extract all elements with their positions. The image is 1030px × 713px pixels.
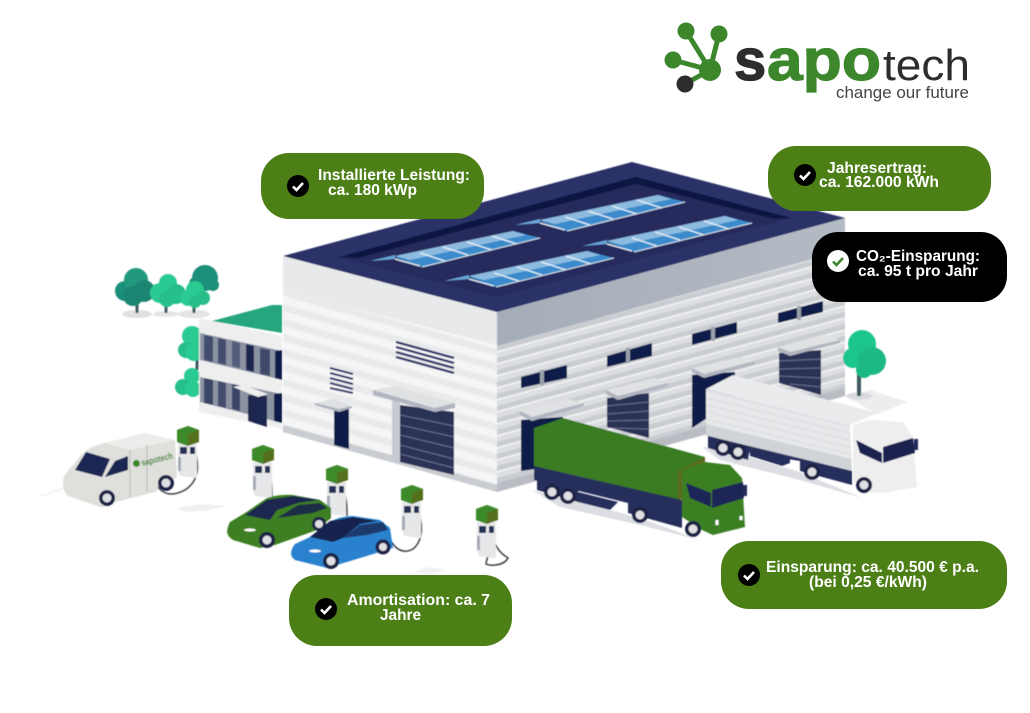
charger 4 — [391, 485, 423, 551]
green trailer top and side — [534, 418, 705, 500]
left wall plinth — [283, 425, 497, 492]
callout text line 2: ca. 180 kWp — [328, 182, 417, 199]
dock canopy 3 — [692, 357, 755, 378]
tree: right of building — [843, 330, 908, 414]
white truck windshield — [883, 438, 915, 463]
charger 5 — [476, 505, 508, 565]
side door canopy — [315, 399, 352, 412]
window 2 — [607, 343, 652, 367]
logo: sapotech — [664, 22, 970, 102]
roof inner floor — [339, 177, 791, 297]
callout text line 1: Installierte Leistung: — [318, 167, 470, 184]
charger 2 — [252, 445, 274, 498]
callout text line 1: Einsparung: ca. 40.500 € p.a. — [766, 559, 979, 576]
green car windshield and roof — [245, 496, 320, 520]
side door — [334, 408, 349, 449]
callout text line 2: Jahre — [380, 607, 421, 624]
callout text line 2: ca. 162.000 kWh — [819, 174, 939, 191]
callout: Installierte Leistung — [261, 153, 484, 219]
white trailer lower strip — [706, 424, 852, 472]
icon: check — [738, 564, 760, 586]
green truck headlights — [717, 516, 741, 525]
vent small — [330, 368, 353, 393]
green truck windshield — [712, 482, 744, 508]
right wall upper band — [497, 218, 845, 346]
white truck wheels — [715, 440, 872, 493]
callout text line 2: (bei 0,25 €/kWh) — [809, 574, 927, 591]
van windshield — [75, 452, 110, 477]
icon: check — [315, 598, 337, 620]
window 4 — [778, 301, 823, 323]
van logo: sapotech — [140, 451, 174, 468]
green truck cab back — [678, 457, 705, 500]
blue car side windows — [343, 522, 388, 538]
right wall plinth — [497, 388, 845, 492]
icon: check — [287, 175, 309, 197]
green truck side window — [686, 483, 711, 507]
blue car windshield and roof — [310, 517, 378, 542]
illustration: warehouse scene — [40, 162, 918, 574]
dock canopy 1 — [520, 399, 584, 421]
white trailer top — [706, 375, 877, 425]
left wall upper band — [283, 256, 497, 345]
green car wheels — [259, 517, 326, 548]
office building — [199, 305, 282, 432]
warehouse building — [283, 162, 845, 492]
logo icon: network nodes — [664, 22, 728, 92]
green car headlight — [244, 528, 256, 532]
callout text line 2: ca. 95 t pro Jahr — [858, 263, 978, 280]
window 3 — [692, 322, 737, 345]
charger 3 — [326, 465, 348, 516]
callout: Amortisation — [289, 575, 512, 646]
dock door 1 — [521, 417, 563, 471]
green roof — [212, 305, 282, 333]
trees: back-left group — [115, 265, 219, 318]
dock door 4 — [779, 350, 821, 395]
van roof — [105, 433, 175, 450]
vent large — [396, 342, 454, 373]
callout: CO2-Einsparung — [812, 232, 1007, 302]
solar panel D — [582, 216, 752, 252]
callout text line 1: CO₂-Einsparung: — [856, 248, 980, 265]
window 1 — [521, 365, 567, 388]
green car — [227, 495, 331, 548]
roof — [283, 162, 845, 312]
solar panel C — [444, 251, 614, 287]
callout text line 1: Amortisation: ca. 7 — [347, 592, 490, 609]
dock door 3 — [692, 372, 735, 428]
blue car headlight — [309, 550, 321, 552]
callout: Einsparung — [721, 541, 1007, 609]
white trailer side — [706, 389, 852, 468]
van — [63, 433, 177, 507]
right wall — [497, 218, 845, 492]
white truck chassis — [708, 436, 852, 485]
green truck — [532, 418, 747, 540]
garage canopy — [373, 386, 455, 412]
callout text line 1: Jahresertrag: — [827, 160, 927, 177]
upper windows — [200, 333, 282, 380]
logo tagline: change our future — [836, 83, 969, 102]
white truck side window — [856, 440, 882, 463]
icon: check — [827, 250, 849, 272]
dock door 2 — [607, 393, 649, 438]
van body — [63, 433, 177, 507]
logo wordmark tech: tech — [883, 41, 970, 90]
left wall — [283, 256, 497, 492]
green truck wheels — [544, 484, 701, 537]
dock canopy 4 — [778, 335, 840, 356]
van wheels — [99, 475, 174, 506]
van door lines — [130, 445, 147, 497]
lower windows — [200, 377, 282, 427]
garage door — [392, 400, 454, 475]
blue car — [291, 516, 393, 569]
blue car wheels — [323, 540, 390, 569]
ground marks — [40, 485, 447, 574]
white truck cab — [853, 420, 917, 493]
solar panel B — [515, 195, 685, 231]
logo wordmark s: s — [734, 28, 766, 93]
green truck cab — [682, 462, 745, 535]
roof inner rim — [339, 177, 791, 258]
solar panel A — [370, 231, 540, 267]
green truck side mirror — [743, 485, 747, 496]
van side window — [105, 456, 128, 477]
white truck mirror — [914, 439, 918, 450]
green truck chassis — [534, 466, 682, 528]
charger 1 — [158, 426, 199, 494]
white truck — [702, 375, 918, 498]
green car side windows — [277, 503, 327, 518]
callout: Jahresertrag — [768, 146, 991, 211]
icon: check — [794, 164, 816, 186]
dock canopy 2 — [606, 378, 668, 400]
logo wordmark green part: apo — [767, 28, 881, 93]
trees: beside office — [175, 326, 203, 397]
